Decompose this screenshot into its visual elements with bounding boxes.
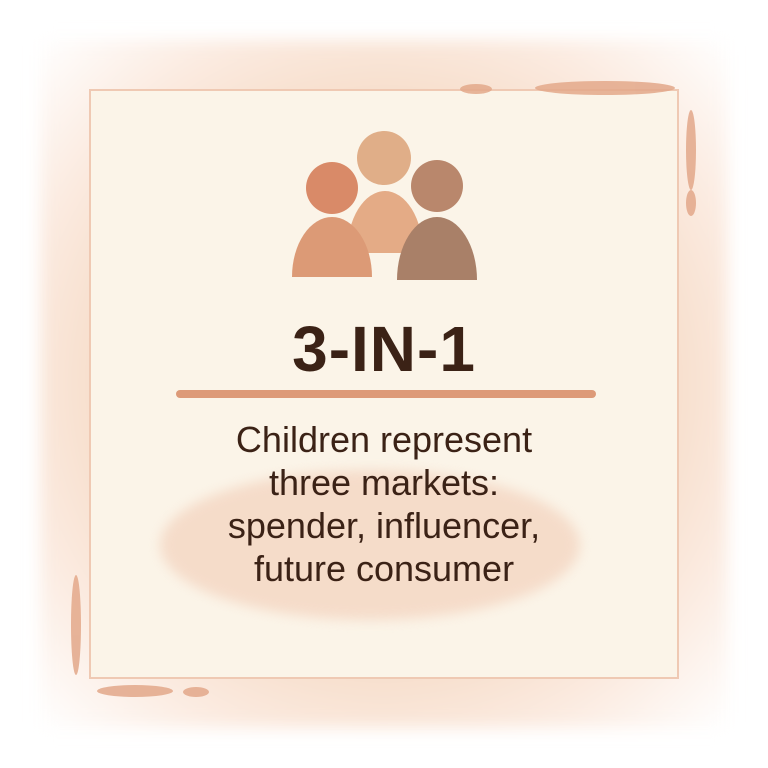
- panel: [89, 89, 679, 679]
- title: 3-IN-1: [292, 313, 476, 385]
- underline stroke: [176, 390, 596, 398]
- description text: [228, 419, 540, 589]
- description text: Children represent: [236, 419, 532, 460]
- description text: three markets:: [269, 462, 499, 503]
- description text: spender, influencer,: [228, 505, 540, 546]
- description text: future consumer: [254, 548, 514, 589]
